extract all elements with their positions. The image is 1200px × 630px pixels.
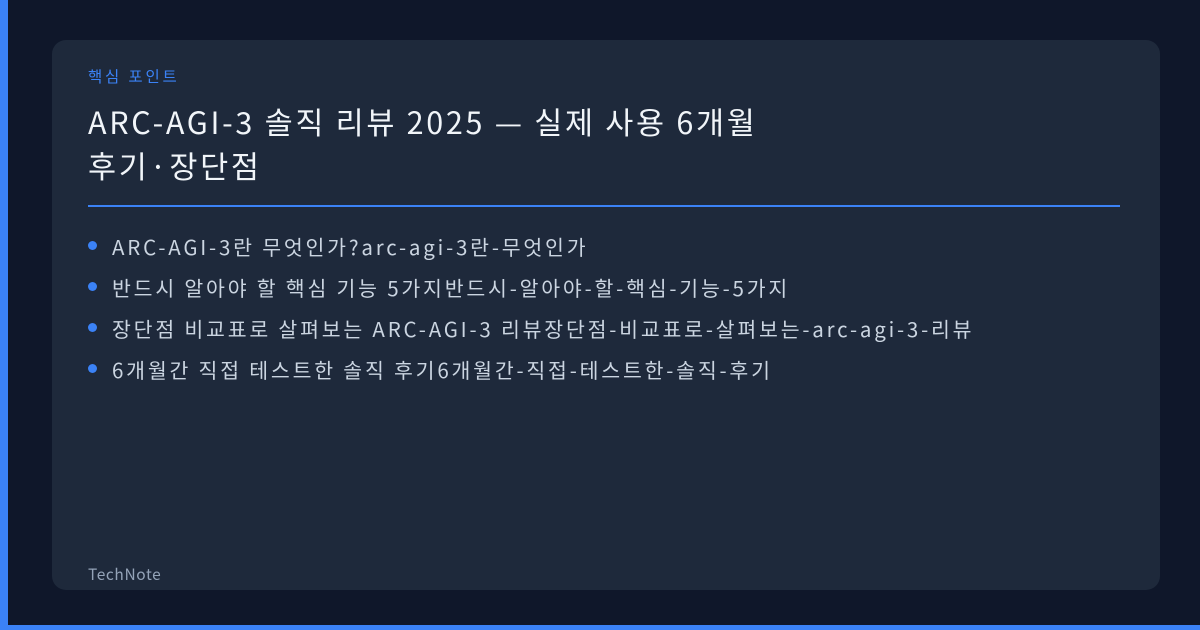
title [88,99,757,187]
title: ARC-AGI-3 솔직 리뷰 2025 — 실제 사용 6개월 [88,99,757,143]
tag label: 핵심 포인트 [88,65,180,87]
footer brand: TechNote [88,563,161,585]
title: 후기·장단점 [88,143,262,187]
bullet 1: ARC-AGI-3란 무엇인가?arc-agi-3란-무엇인가 [112,231,588,261]
bullet 3: 장단점 비교표로 살펴보는 ARC-AGI-3 리뷰장단점-비교표로-살펴보는-arc-agi-3-리뷰 [112,313,974,343]
bullet list [88,231,974,384]
bullet 4: 6개월간 직접 테스트한 솔직 후기6개월간-직접-테스트한-솔직-후기 [112,354,773,384]
bullet 2: 반드시 알아야 할 핵심 기능 5가지반드시-알아야-할-핵심-기능-5가지 [112,272,790,302]
